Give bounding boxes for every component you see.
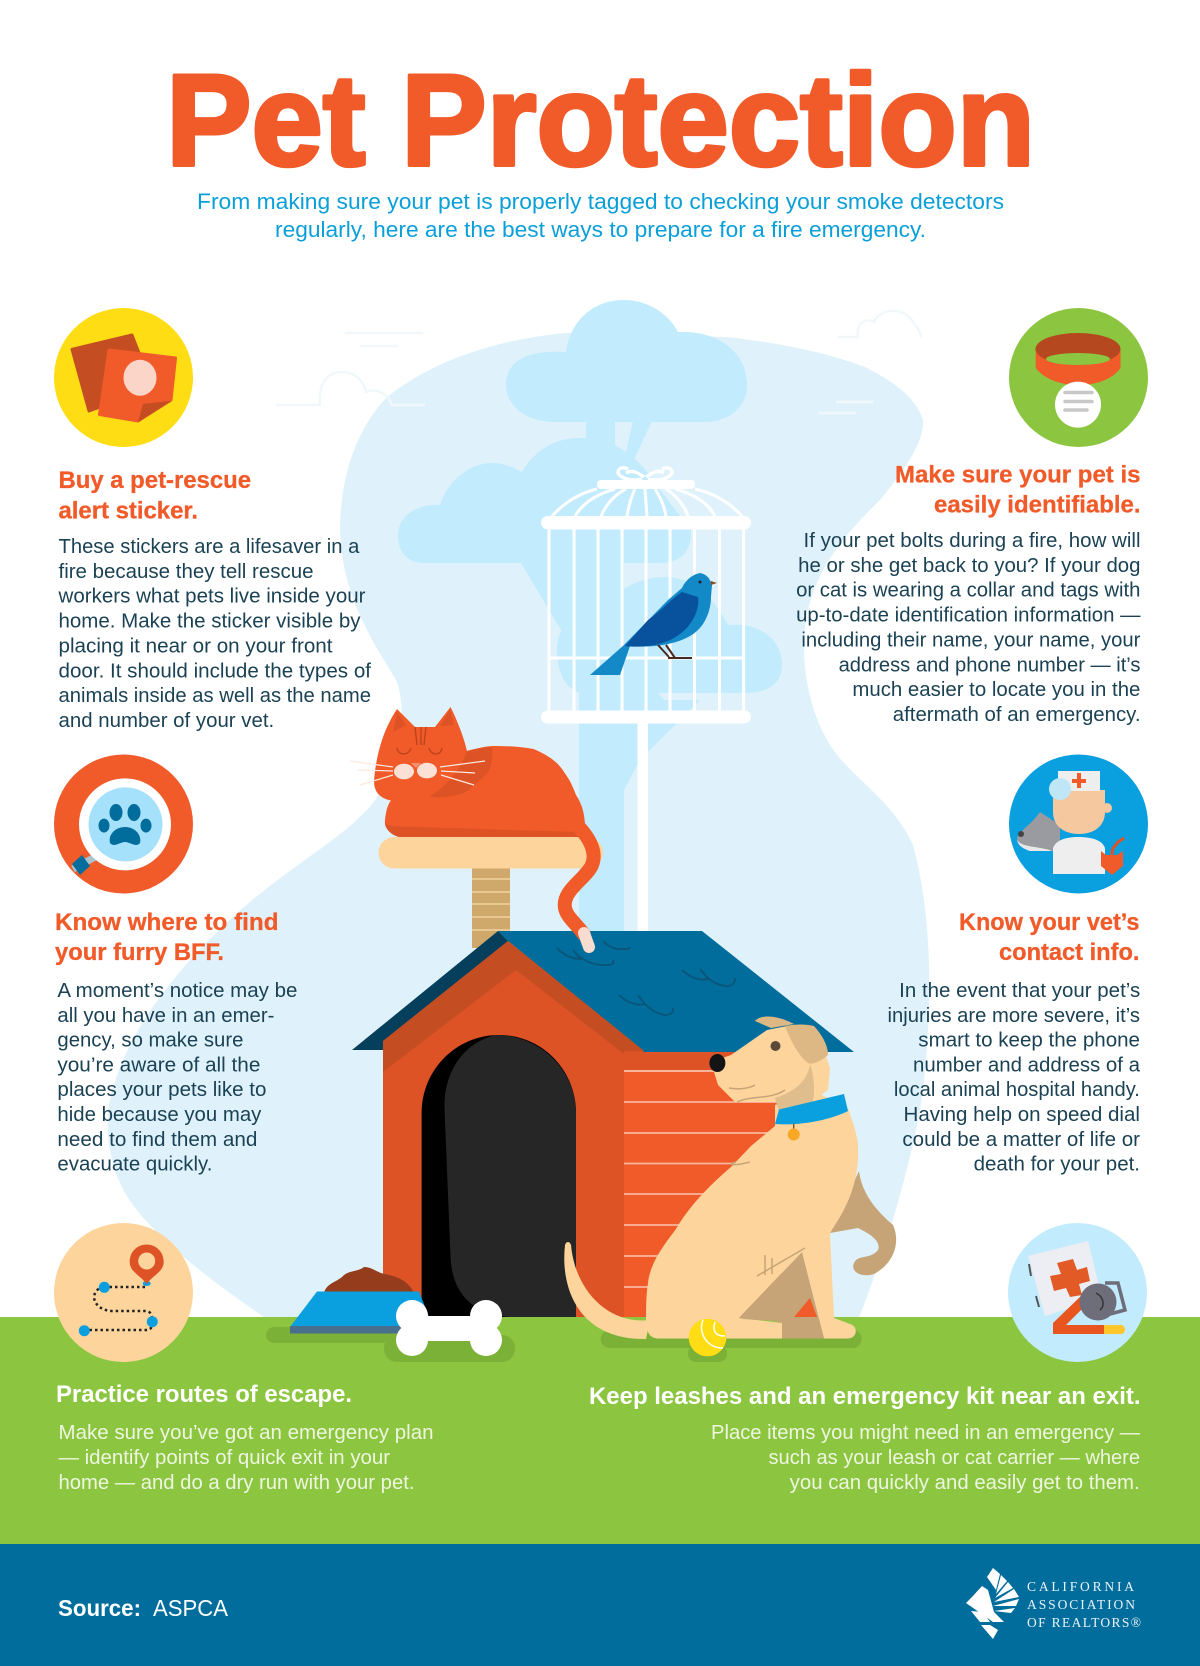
roof shingles [557,941,735,1015]
logo: California Association of Realtors [966,1568,1141,1639]
heading: buy a sticker: Buy a pet-rescue [58,467,251,494]
text: identifiable: or cat is wearing a collar and tags with [796,580,1140,602]
vet coat [1053,837,1105,874]
roof dark eave [352,931,508,1050]
text: buy a sticker: fire because they tell rescue [58,561,314,583]
logo wordmark [1027,1579,1141,1630]
vet ears and hair [1102,803,1112,813]
subtitle: From making sure your pet is properly tagged to checking your smoke detectors [197,189,1004,214]
title: Pet Protection [166,47,1035,193]
dog head [711,1026,830,1110]
text: identifiable: aftermath of an emergency. [893,704,1140,726]
cage pole [638,722,648,932]
text: find your pet: places your pets like to [57,1079,266,1101]
platform [378,837,603,868]
text: find your pet: need to find them and [57,1129,257,1151]
icon: vet [1009,754,1148,894]
text: find your pet: gency, so make sure [57,1030,243,1052]
heading: find your pet: Know where to find [55,909,278,936]
logo wordmark: OF REALTORS® [1027,1615,1141,1630]
subtitle: regularly, here are the best ways to prepare for a fire emergency. [275,217,926,242]
dog body [646,1090,858,1338]
ground [0,1317,1200,1545]
text: find your pet: you’re aware of all the [57,1054,260,1076]
food [324,1267,414,1293]
text: identifiable: much easier to locate you in the [852,679,1140,701]
text: escape routes: Make sure you’ve got an emergency plan [58,1422,434,1444]
text: vet contact: injuries are more severe, it’s [888,1005,1140,1027]
text: vet contact: In the event that your pet’s [899,980,1140,1002]
cat body [374,707,585,837]
tree behind the cage [398,300,782,931]
roof [498,931,854,1052]
cat [350,707,594,947]
tennis ball [689,1319,726,1356]
text: identifiable: up-to-date identification information — [796,605,1140,627]
dog neck shade [775,1064,814,1115]
bowl [290,1292,433,1327]
dog ears [755,1016,828,1064]
bird [590,573,717,675]
cage ornament [618,468,672,480]
logo wordmark: ASSOCIATION [1027,1597,1135,1612]
vet hat [1058,771,1100,791]
heading: escape routes: Practice routes of escape. [56,1381,352,1408]
text: leashes and kit: Place items you might need in an emergency — [711,1422,1140,1444]
heading: buy a sticker [58,467,251,524]
house front [383,941,644,1317]
text: leashes and kit [711,1422,1140,1494]
lower cloud [557,577,782,693]
text: buy a sticker [57,536,371,732]
logo mark [966,1568,1019,1639]
text: find your pet: A moment’s notice may be [57,980,297,1002]
heading: identifiable: easily identifiable. [934,492,1140,518]
heading: vet contact: contact info. [999,939,1140,966]
icon: collar [1009,308,1148,447]
text: identifiable: including their name, your name, your [801,629,1141,651]
text: identifiable: If your pet bolts during a fire, how will [804,530,1140,552]
background blob [108,333,929,1320]
heading: identifiable [895,462,1140,518]
cage bars [549,489,744,711]
house front shade [383,941,644,1072]
vet head [1053,790,1105,834]
text: vet contact: smart to keep the phone [918,1030,1140,1052]
bone [396,1300,502,1356]
text: buy a sticker: placing it near or on your front [58,635,333,657]
heading: identifiable: Make sure your pet is [895,462,1140,488]
text: vet contact: number and address of a [913,1054,1141,1076]
text: vet contact [888,980,1141,1176]
heading: leashes and kit: Keep leashes and an emergency kit near an exit. [589,1383,1140,1410]
subtitle [197,189,1004,242]
icon: magnifier with paw [54,754,193,894]
middle cloud [398,438,691,563]
icon: sticker [54,308,193,447]
text: vet contact: could be a matter of life or [902,1129,1140,1151]
post [472,868,510,948]
text: find your pet [57,980,297,1176]
cat at vet [1101,851,1123,875]
food bowl [290,1267,433,1334]
top cloud [506,300,747,422]
wall stripes [624,1071,782,1287]
heading: find your pet [55,909,278,966]
cage rims [541,516,751,530]
text: escape routes [58,1422,434,1494]
source line [58,1595,229,1621]
text: find your pet: all you have in an emer- [57,1005,274,1027]
heading: vet contact [959,909,1140,966]
heading: vet contact: Know your vet’s [959,909,1140,936]
heading: buy a sticker: alert sticker. [58,498,198,524]
text: escape routes: home — and do a dry run with your pet. [58,1472,414,1494]
text: find your pet: hide because you may [57,1104,261,1126]
dog tag [788,1124,800,1140]
dog eye and nose [770,1041,780,1051]
cat shading [429,747,492,797]
text: identifiable: address and phone number — it’s [839,654,1140,676]
icon: escape route [54,1223,193,1362]
footer band [0,1544,1200,1666]
text: leashes and kit: such as your leash or cat carrier — where [768,1447,1140,1469]
text: buy a sticker: and number of your vet. [58,710,274,732]
wall triangle between the legs [794,1298,817,1317]
source line: Source: [58,1595,141,1621]
bird cage [541,468,751,932]
cat tail [565,824,594,936]
text: buy a sticker: These stickers are a lifesaver in a [58,536,360,558]
icon: emergency kit and leash [1008,1223,1147,1362]
text: leashes and kit: you can quickly and easily get to them. [790,1472,1140,1494]
text: identifiable: he or she get back to you? If your dog [798,555,1140,577]
faint background clouds [276,311,922,413]
dog hind shade [739,1252,824,1338]
text: buy a sticker: animals inside as well as the name [58,685,371,707]
text: buy a sticker: workers what pets live inside your [57,586,366,608]
cat face [350,727,485,785]
dog house [352,931,854,1317]
dog tail [564,1242,650,1339]
tree trunk and branches [521,421,652,931]
heading: find your pet: your furry BFF. [55,939,224,966]
dog back leg and curl tail shade [830,1171,896,1275]
cat tail tip [584,933,589,947]
side wall [624,1051,782,1317]
bird beak and legs [711,581,717,585]
bird wing [625,592,698,647]
dog collar [775,1094,848,1124]
dog [564,1016,896,1339]
text: buy a sticker: home. Make the sticker visible by [58,611,360,633]
logo wordmark: CALIFORNIA [1027,1579,1134,1594]
text: escape routes: — identify points of quick exit in your [58,1447,390,1469]
ground shadows [266,1327,862,1362]
door [422,1035,576,1317]
text: buy a sticker: door. It should include the types of [58,660,371,682]
dog at vet [1017,812,1060,851]
cat tree [378,837,603,948]
wall top shade [624,1038,740,1070]
bird body [590,573,712,675]
text: vet contact: Having help on speed dial [904,1104,1140,1126]
text: find your pet: evacuate quickly. [57,1154,212,1176]
source line: ASPCA [153,1595,229,1621]
text: identifiable [796,530,1141,726]
text: vet contact: death for your pet. [974,1154,1140,1176]
text: vet contact: local animal hospital handy. [894,1079,1140,1101]
